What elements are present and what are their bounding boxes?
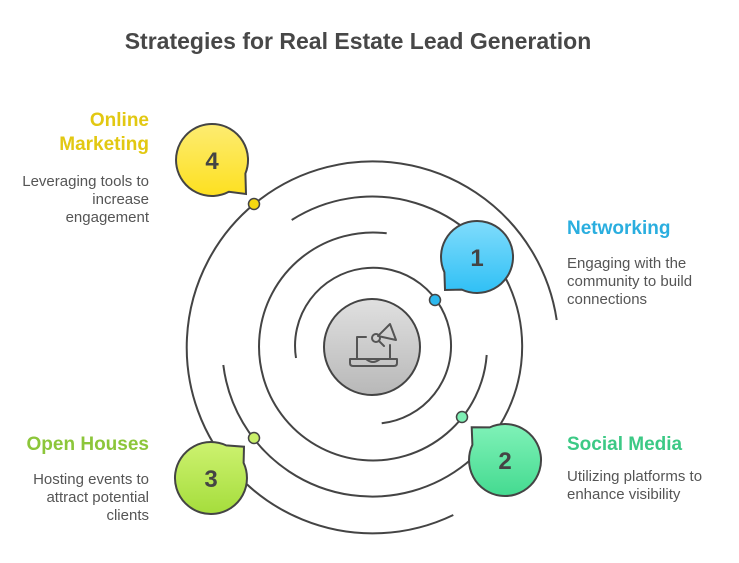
text: online marketing bbox=[22, 110, 150, 226]
text: networking bbox=[567, 218, 692, 308]
spiral rings bbox=[187, 161, 557, 533]
bubble 4 bbox=[176, 124, 248, 196]
text: online marketing: Marketing bbox=[59, 134, 149, 155]
text: social media: Social Media bbox=[567, 434, 683, 455]
text: networking: Networking bbox=[567, 218, 670, 239]
text: open houses bbox=[27, 434, 149, 524]
text: open houses: Hosting events to bbox=[33, 471, 149, 488]
title: Strategies for Real Estate Lead Generation bbox=[125, 28, 591, 54]
bubble 4: 4 bbox=[205, 148, 219, 175]
text: online marketing: increase bbox=[92, 191, 149, 208]
text: social media: Utilizing platforms to bbox=[567, 468, 702, 485]
text: networking: community to build bbox=[567, 273, 692, 290]
text: open houses: attract potential bbox=[46, 489, 149, 506]
text: networking: Engaging with the bbox=[567, 255, 686, 272]
dot: open houses bbox=[248, 432, 260, 444]
text: online marketing: engagement bbox=[66, 209, 150, 226]
text: open houses: Open Houses bbox=[27, 434, 149, 455]
text: social media bbox=[567, 434, 702, 503]
bubble 2: 2 bbox=[498, 448, 512, 475]
text: online marketing: Online bbox=[90, 110, 149, 131]
bubble 2 bbox=[469, 424, 541, 496]
text: open houses: clients bbox=[106, 507, 149, 524]
bubble 1: 1 bbox=[470, 245, 484, 272]
text: networking: connections bbox=[567, 291, 647, 308]
center icon: laptop with megaphone bbox=[324, 299, 420, 395]
bubble 3: 3 bbox=[204, 466, 218, 493]
text: social media: enhance visibility bbox=[567, 486, 681, 503]
bubble 3 bbox=[175, 442, 247, 514]
text: online marketing: Leveraging tools to bbox=[22, 173, 149, 190]
dot: social bbox=[456, 412, 468, 422]
bubble 1 bbox=[441, 221, 513, 293]
dot: marketing bbox=[248, 198, 260, 210]
dot: networking bbox=[430, 294, 440, 306]
